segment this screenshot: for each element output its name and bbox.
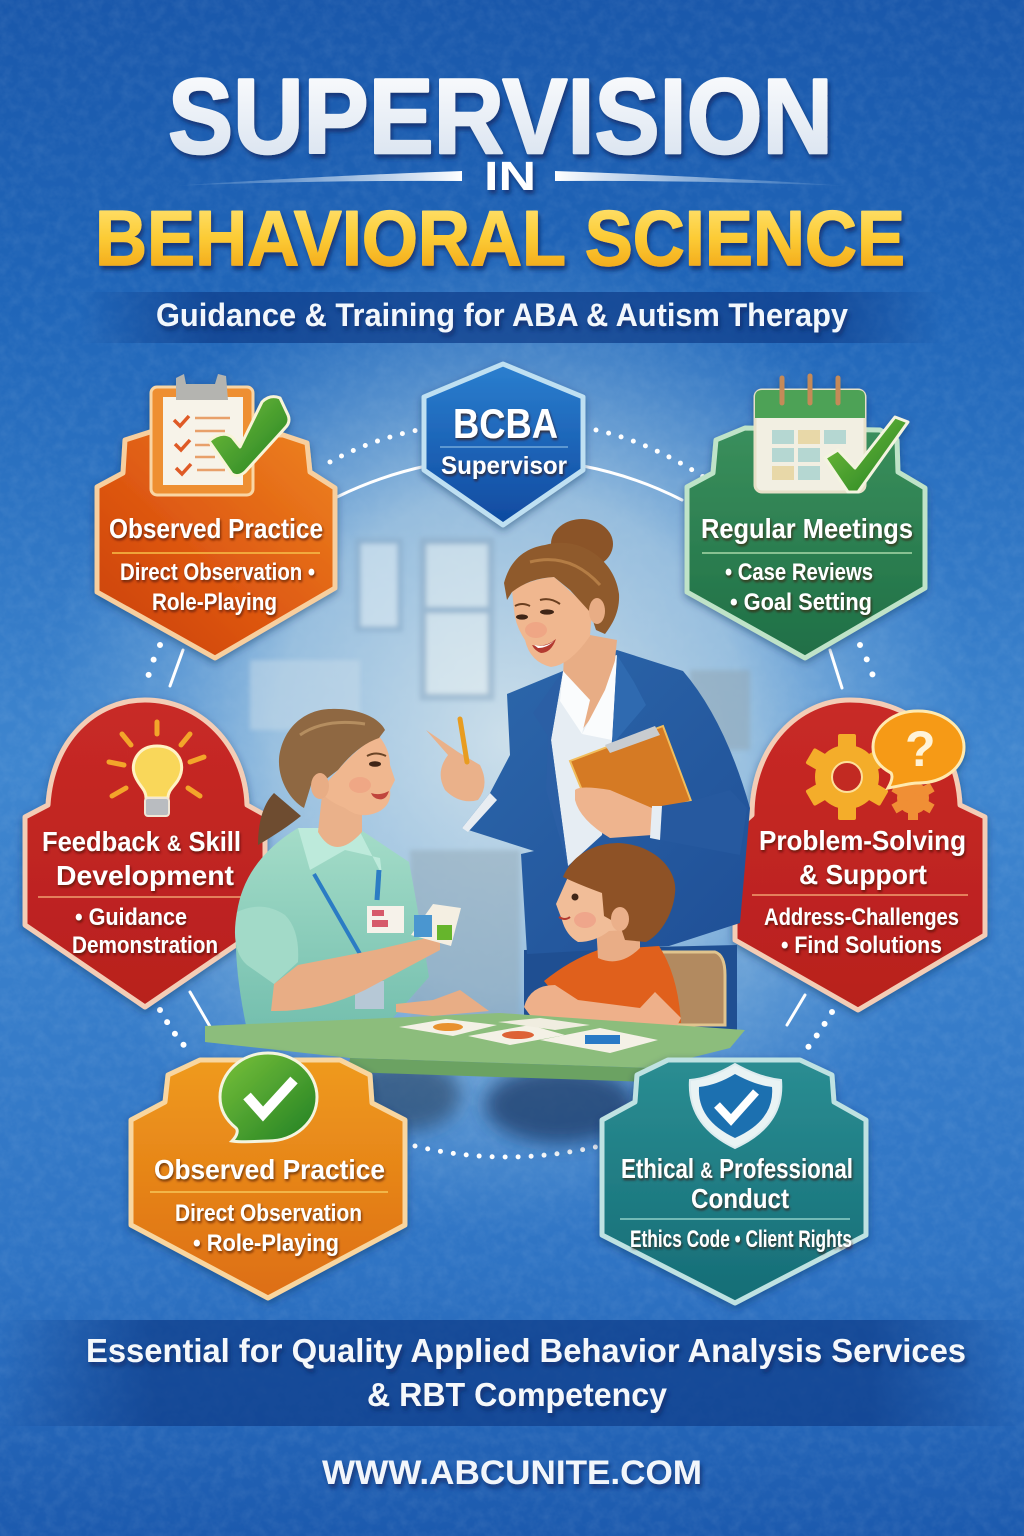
list: direct observation and role-playing — [175, 1200, 362, 1257]
website url: WWW.ABCUNITE.COM — [322, 1454, 702, 1492]
table with cards — [205, 1013, 745, 1143]
list: direct observation and role-playing: Direct Observation • — [120, 559, 315, 586]
badge: BCBA supervisor: Supervisor — [441, 452, 567, 480]
panel: observed practice top left — [97, 374, 335, 658]
list: guidance and demonstration: • Guidance — [75, 904, 187, 931]
list: guidance and demonstration — [72, 904, 218, 959]
list: direct observation and role-playing: Direct Observation — [175, 1200, 362, 1227]
list: case reviews and goal setting: • Case Reviews — [725, 559, 873, 586]
heading: feedback and skill development — [42, 826, 241, 891]
heading: observed practice: Observed Practice — [154, 1154, 385, 1185]
chair and child — [524, 843, 725, 1036]
icon: green check bubble — [220, 1053, 317, 1142]
bottom banner — [0, 1320, 1024, 1426]
heading: problem-solving and support: & Support — [799, 859, 927, 890]
badge: BCBA supervisor — [424, 364, 583, 525]
heading: ethical and professional conduct — [621, 1153, 853, 1214]
list: direct observation and role-playing: Role-Playing — [152, 589, 277, 616]
title: BEHAVIORAL SCIENCE — [95, 194, 905, 282]
panel: ethical and professional conduct — [602, 1060, 866, 1303]
pointing hand and pencil — [462, 793, 497, 832]
bottom banner: & RBT Competency — [367, 1376, 668, 1413]
heading: problem-solving and support — [759, 825, 966, 890]
badge: BCBA supervisor: BCBA — [453, 400, 558, 447]
background room window scene — [250, 541, 750, 1020]
subtitle banner — [80, 292, 944, 343]
supervisor — [426, 519, 750, 1030]
panel: observed practice bottom left — [131, 1053, 405, 1298]
head — [512, 577, 592, 667]
panel: feedback and skill development — [25, 700, 265, 1007]
heading: regular meetings: Regular Meetings — [701, 513, 913, 544]
illustration: supervisor, therapist and child at table — [205, 519, 750, 1143]
icon: calendar with check — [755, 376, 908, 492]
list: address challenges and find solutions: Address-Challenges — [764, 904, 959, 931]
icon: clipboard with check — [151, 374, 289, 495]
heading: problem-solving and support: Problem-Solving — [759, 825, 966, 856]
heading: observed practice: Observed Practice — [109, 513, 323, 544]
heading: feedback and skill development: Development — [56, 860, 234, 891]
panel: problem-solving and support — [735, 700, 985, 1010]
bottom banner: Essential for Quality Applied Behavior Analysis Services — [86, 1332, 966, 1369]
heading: ethical and professional conduct: Conduct — [691, 1183, 789, 1214]
list: address challenges and find solutions: • Find Solutions — [781, 932, 942, 959]
folder — [570, 726, 691, 818]
title: IN — [484, 153, 536, 199]
subtitle banner: Guidance & Training for ABA & Autism Therapy — [156, 297, 848, 333]
icon: gears and question bubble: ? — [905, 721, 936, 777]
list: case reviews and goal setting: • Goal Setting — [730, 589, 872, 616]
heading: ethical and professional conduct: Ethical & Professional — [621, 1153, 853, 1184]
list: direct observation and role-playing: • Role-Playing — [193, 1230, 339, 1257]
title — [95, 56, 905, 282]
list: guidance and demonstration: Demonstration — [72, 932, 218, 959]
icon: gears and question bubble — [805, 711, 964, 820]
list: ethics code and client rights: Ethics Code • Client Rights — [630, 1226, 852, 1253]
connecting ring — [145, 430, 876, 1157]
title: SUPERVISION — [168, 56, 833, 176]
icon: light bulb — [109, 722, 204, 816]
list: case reviews and goal setting — [725, 559, 873, 616]
icon: shield with check — [690, 1064, 781, 1148]
list: direct observation and role-playing — [120, 559, 315, 616]
panel: regular meetings — [687, 376, 925, 658]
therapist — [235, 709, 489, 1030]
list: address challenges and find solutions — [764, 904, 959, 959]
heading: feedback and skill development: Feedback & Skill — [42, 826, 241, 857]
